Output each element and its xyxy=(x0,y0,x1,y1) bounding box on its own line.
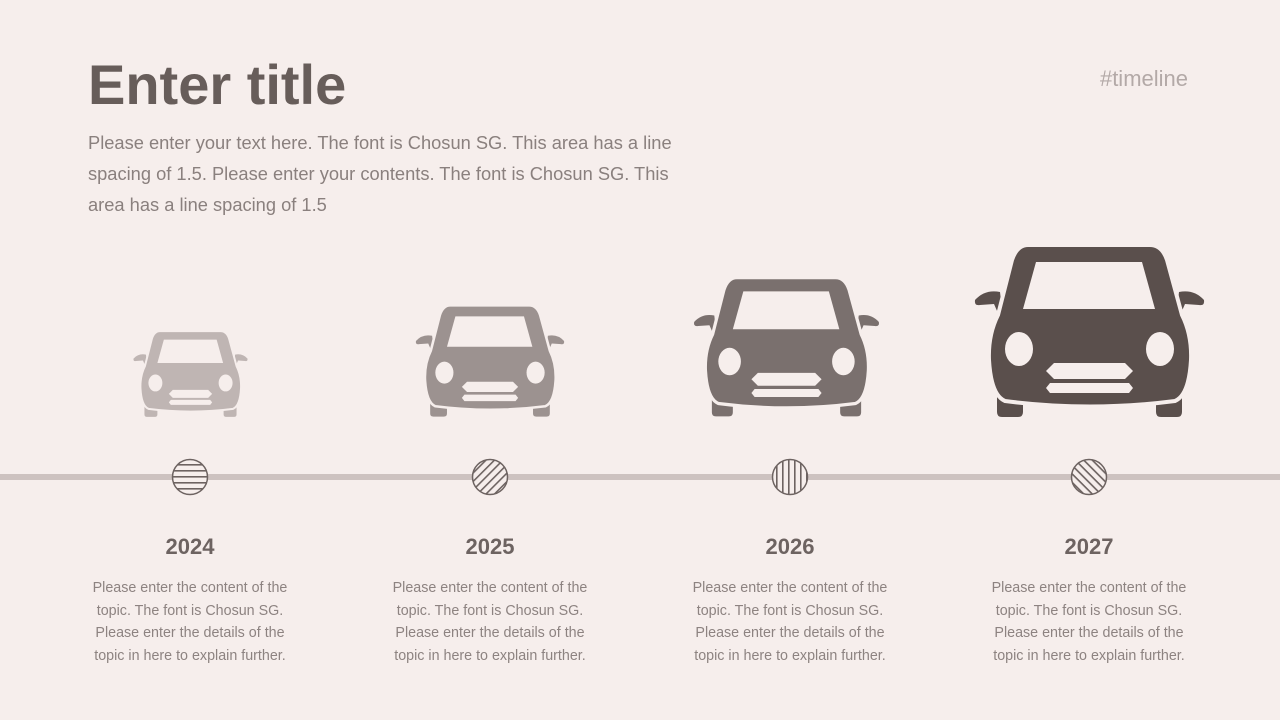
desc 2026: Please enter the content of the topic. The font is Chosun SG. xyxy=(693,580,887,619)
year 2025: 2025 xyxy=(466,534,514,559)
desc 2027: Please enter the content of the topic. The font is Chosun SG. xyxy=(992,580,1186,619)
icon: car 2027 xyxy=(974,247,1204,417)
year 2024: 2024 xyxy=(166,534,214,559)
year 2026: 2026 xyxy=(766,534,814,559)
desc 2025: Please enter the details of the topic in here to explain further. xyxy=(394,625,586,664)
desc 2027 xyxy=(992,580,1186,664)
icon: car 2026 xyxy=(694,279,879,416)
desc 2024: Please enter the details of the topic in here to explain further. xyxy=(94,625,286,664)
marker 2026 xyxy=(772,460,808,494)
desc 2025: Please enter the content of the topic. The font is Chosun SG. xyxy=(393,580,587,619)
desc 2026: Please enter the details of the topic in here to explain further. xyxy=(694,625,886,664)
desc 2024: Please enter the content of the topic. The font is Chosun SG. xyxy=(93,580,287,619)
desc 2026 xyxy=(693,580,887,664)
marker 2024 xyxy=(172,460,208,494)
title: Enter title xyxy=(88,53,346,116)
desc 2027: Please enter the details of the topic in here to explain further. xyxy=(993,625,1185,664)
marker 2027 xyxy=(1072,460,1106,494)
intro paragraph: Please enter your text here. The font is Chosun SG. This area has a line spacing of 1.5. Please enter your contents. The font is Chosun SG. This area has a line spacing of 1.5 xyxy=(88,132,672,215)
icon: car 2024 xyxy=(134,332,248,417)
marker 2025 xyxy=(472,460,508,494)
icon: car 2025 xyxy=(416,306,564,417)
year 2027: 2027 xyxy=(1065,534,1113,559)
hashtag: #timeline xyxy=(1100,66,1188,91)
desc 2025 xyxy=(393,580,587,664)
timeline xyxy=(0,458,1280,496)
desc 2024 xyxy=(93,580,287,664)
